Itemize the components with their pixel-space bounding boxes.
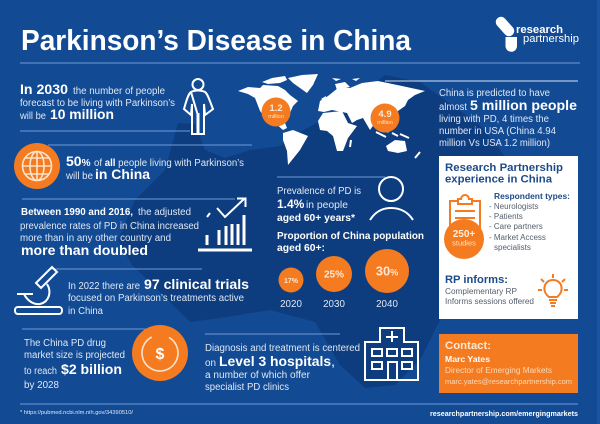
text: clinical trials: 97 clinical trials bbox=[144, 276, 249, 292]
callout: China 4.9 million: 4.9 bbox=[378, 109, 392, 120]
text: RP informs: Informs sessions offered bbox=[445, 297, 534, 306]
circle chart: 2020: 2020 bbox=[280, 299, 302, 310]
circle chart: 2020: 17% bbox=[284, 278, 299, 285]
text: 5 million people bbox=[439, 88, 577, 149]
icon: microscope bbox=[15, 267, 62, 314]
text: RP informs: RP informs: bbox=[445, 274, 508, 286]
text: 5 million people: China is predicted to have bbox=[439, 88, 551, 99]
callout: USA 1.2 million: million bbox=[268, 114, 284, 120]
panel: contact: marc.yates@researchpartnership.com bbox=[445, 379, 572, 386]
text: level 3 hospitals: Diagnosis and treatment is centered bbox=[205, 343, 360, 354]
icon: clipboard with 250+ studies bbox=[444, 195, 484, 259]
panel heading bbox=[445, 162, 563, 186]
text: 5 million people: number in USA (China 4.94 bbox=[439, 126, 557, 137]
text: 50 percent bbox=[65, 153, 244, 182]
text: drug market size: The China PD drug bbox=[24, 338, 106, 349]
text: respondent types: - Care partners bbox=[489, 222, 543, 231]
logo: research partnership: partnership bbox=[523, 33, 579, 45]
text: RP informs: Complementary RP bbox=[445, 287, 517, 296]
text: respondent types: - Patients bbox=[489, 212, 523, 221]
text: level 3 hospitals: a number of which offer bbox=[205, 370, 311, 381]
text: prevalence: aged 60+ years* bbox=[277, 213, 355, 224]
background: China silhouette bbox=[118, 75, 512, 388]
text: 2030 forecast: will be bbox=[19, 111, 47, 122]
circle chart: 2030 bbox=[316, 256, 352, 310]
text: clinical trials: focused on Parkinson’s treatments active bbox=[68, 293, 245, 304]
text: 50 percent: in China bbox=[95, 166, 150, 182]
text: 50 percent: will be bbox=[65, 171, 94, 182]
text: level 3 hospitals: on bbox=[205, 358, 216, 369]
icon: dollar coin bbox=[132, 325, 188, 381]
text: prevalence bbox=[277, 186, 361, 224]
text: drug market size: to reach bbox=[24, 366, 57, 377]
text: respondent types: - Market Access bbox=[489, 233, 546, 242]
circle chart: 2040: 2040 bbox=[376, 299, 398, 310]
icon: hospital bbox=[365, 328, 418, 380]
text: respondent types: Respondent types: bbox=[494, 192, 570, 201]
text: 5 million people: 5 million people bbox=[470, 97, 577, 113]
text: 2030 forecast: forecast to be living with Parkinson’s bbox=[20, 98, 175, 109]
website link: researchpartnership.com/emergingmarkets bbox=[430, 409, 578, 418]
icon: dollar coin: $ bbox=[156, 346, 165, 363]
text: 5 million people: living with PD, 4 times the bbox=[439, 114, 550, 125]
world map bbox=[238, 74, 425, 165]
text: 2030 forecast: In 2030 bbox=[20, 82, 68, 97]
callout: China 4.9 million bbox=[370, 104, 400, 132]
icon: light bulb bbox=[538, 274, 568, 306]
text: drug market size: $2 billion bbox=[61, 361, 122, 377]
panel heading: experience in China bbox=[445, 174, 553, 186]
text: 1990 to 2016 prevalence: the adjusted bbox=[138, 207, 191, 218]
text: 5 million people: almost bbox=[439, 102, 467, 113]
circle chart: 2030: 2030 bbox=[323, 299, 345, 310]
text: drug market size: market size is projected bbox=[24, 350, 125, 361]
footnote: * https://pubmed.ncbi.nlm.nih.gov/34390510/ bbox=[20, 410, 134, 416]
text: respondent types: - Neurologists bbox=[489, 202, 538, 211]
text: prevalence: Prevalence of PD is bbox=[277, 186, 361, 197]
text: drug market size bbox=[24, 338, 125, 391]
text: 2030 forecast: 10 million bbox=[50, 106, 114, 122]
text: clinical trials bbox=[68, 276, 249, 317]
text: prevalence: in people bbox=[306, 200, 349, 211]
icon: clipboard with 250+ studies: studies bbox=[452, 238, 476, 248]
panel: contact: Marc Yates bbox=[445, 354, 490, 364]
text: 1990 to 2016 prevalence: prevalence rates of PD in China increased bbox=[20, 221, 199, 232]
text: level 3 hospitals bbox=[205, 343, 360, 393]
icon: rising bar chart bbox=[198, 198, 252, 250]
text: RP informs bbox=[445, 274, 534, 306]
text: proportion heading bbox=[277, 231, 424, 254]
title: Parkinson’s Disease in China bbox=[21, 25, 412, 57]
text: respondent types bbox=[489, 192, 570, 252]
text: 50 percent: 50% bbox=[66, 153, 91, 169]
text: proportion heading: aged 60+: bbox=[277, 243, 325, 254]
icon: person outline bbox=[370, 177, 413, 220]
panel: contact: Director of Emerging Markets bbox=[445, 366, 552, 375]
icon: globe in orange circle bbox=[14, 143, 60, 189]
circle chart: 2040: 30% bbox=[376, 264, 398, 278]
text: 5 million people: million Vs USA 1.2 million) bbox=[439, 138, 550, 149]
circle chart: 2040 bbox=[365, 249, 409, 310]
logo: research partnership bbox=[501, 22, 579, 52]
panel: contact bbox=[439, 334, 578, 393]
circle chart: 2020 bbox=[278, 268, 304, 310]
text: respondent types: specialists bbox=[494, 243, 531, 252]
panel: Research Partnership experience bbox=[439, 156, 578, 319]
logo: research partnership: research bbox=[516, 24, 563, 36]
text: 1990 to 2016 prevalence: more than in any other country and bbox=[20, 233, 171, 244]
panel heading: Research Partnership bbox=[445, 162, 563, 174]
text: drug market size: by 2028 bbox=[24, 380, 60, 391]
callout: China 4.9 million: million bbox=[377, 120, 393, 126]
text: 1990 to 2016 prevalence: Between 1990 and 2016, bbox=[21, 207, 133, 218]
text: 50 percent: of all people living with Parkinson’s bbox=[94, 158, 244, 169]
icon: clipboard with 250+ studies: 250+ bbox=[453, 229, 475, 240]
text: clinical trials: in China bbox=[68, 306, 104, 317]
icon: person bbox=[184, 79, 213, 134]
text: 1990 to 2016 prevalence: more than doubled bbox=[21, 242, 148, 258]
text: proportion heading: Proportion of China population bbox=[277, 231, 424, 242]
circle chart: 2030: 25% bbox=[324, 270, 344, 280]
text: level 3 hospitals: Level 3 hospitals, bbox=[219, 353, 335, 369]
callout: USA 1.2 million: 1.2 bbox=[269, 103, 283, 114]
panel: contact: Contact: bbox=[445, 340, 491, 352]
callout: USA 1.2 million bbox=[262, 98, 290, 126]
text: 1990 to 2016 prevalence bbox=[20, 207, 199, 258]
text: level 3 hospitals: specialist PD clinics bbox=[205, 382, 289, 393]
text: 2030 forecast: the number of people bbox=[73, 86, 166, 97]
text: prevalence: 1.4% bbox=[277, 197, 305, 211]
text: clinical trials: In 2022 there are bbox=[68, 281, 141, 292]
text: 2030 forecast bbox=[19, 82, 175, 122]
